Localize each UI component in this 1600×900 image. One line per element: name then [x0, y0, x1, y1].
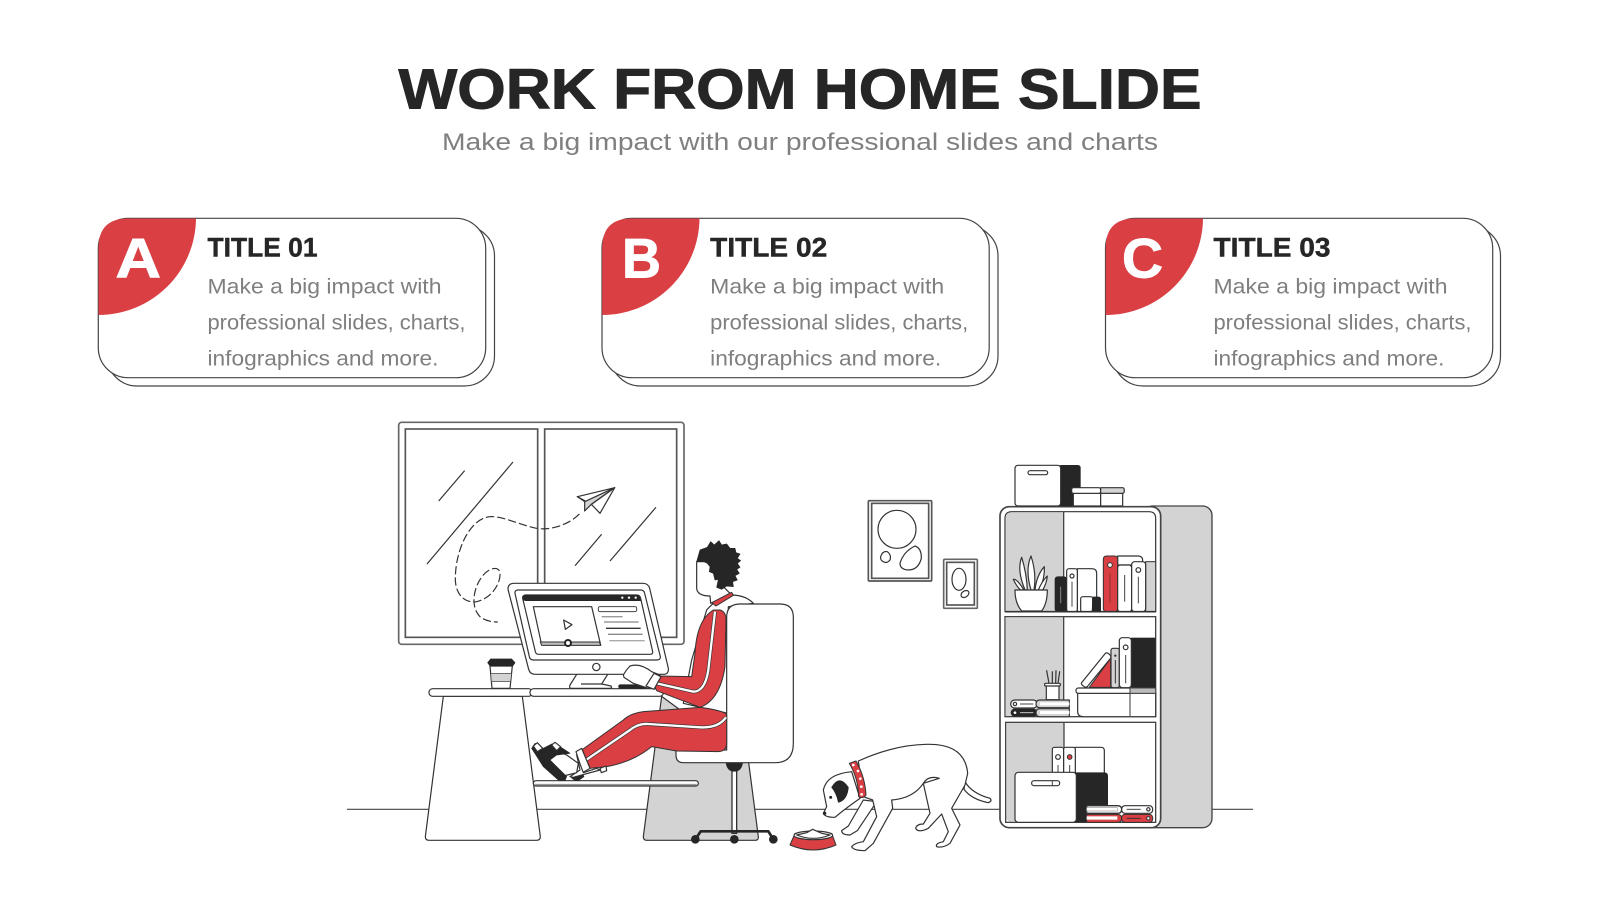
panel: card B	[602, 218, 998, 386]
panel: card C: TITLE 03	[1214, 233, 1330, 263]
binders	[1052, 747, 1104, 776]
ear	[832, 781, 848, 802]
pencil cup	[1045, 671, 1060, 700]
shelf side panel	[1143, 506, 1212, 828]
panel: card B: infographics and more.	[710, 348, 941, 370]
arm	[653, 610, 726, 707]
compartment 1	[1005, 512, 1156, 612]
panel: card C: infographics and more.	[1214, 348, 1444, 370]
floor line	[347, 808, 1253, 810]
panel: card C: professional slides, charts,	[1214, 312, 1472, 334]
text lines	[598, 607, 645, 641]
body	[852, 744, 968, 851]
desk leg	[425, 696, 540, 840]
bookshelf	[1000, 465, 1212, 828]
panel: card A: A	[116, 227, 161, 290]
stand	[570, 673, 612, 688]
leg	[576, 707, 727, 773]
person at desk	[532, 541, 793, 781]
keyboard	[618, 684, 647, 689]
feet and shoes	[532, 742, 600, 781]
torso and shoulder	[683, 595, 753, 713]
subtitle: Make a big impact with our professional slides and charts	[442, 129, 1158, 156]
head	[823, 772, 860, 817]
panel: card B: Make a big impact with	[710, 276, 944, 298]
food bowl	[790, 829, 836, 850]
top shelf boxes	[1015, 465, 1124, 506]
head	[697, 541, 741, 603]
lying books	[1087, 806, 1153, 822]
dashed flight path	[455, 514, 579, 622]
collar	[712, 592, 733, 606]
dog	[790, 744, 991, 851]
paper plane	[577, 488, 615, 513]
hand	[623, 665, 661, 689]
panel: card C	[1106, 218, 1500, 386]
panel: card C: Make a big impact with	[1214, 276, 1448, 298]
chair back and seat	[676, 604, 793, 763]
panel: card B: B	[622, 227, 661, 290]
back front leg	[842, 800, 877, 835]
coffee cup	[488, 659, 515, 688]
grey chair stand background	[643, 696, 758, 840]
potted plant	[1013, 556, 1047, 611]
upright books	[1055, 556, 1156, 612]
leaning and upright books with box	[1076, 638, 1156, 717]
window title bar	[523, 595, 641, 601]
panel: card A: TITLE 01	[208, 233, 318, 263]
panel: card A: professional slides, charts,	[208, 312, 466, 334]
panel: card B: TITLE 02	[710, 233, 827, 263]
compartment 2	[1005, 617, 1156, 717]
bookshelf bottom compartment	[1006, 722, 1156, 822]
collar	[849, 761, 866, 798]
small picture	[944, 559, 977, 608]
shelf body	[1000, 507, 1161, 828]
desk and chair base	[425, 659, 778, 844]
computer monitor	[508, 583, 668, 689]
panel: card A: infographics and more.	[208, 348, 438, 370]
panel: card A	[98, 218, 495, 386]
video panel	[533, 607, 601, 646]
wall pictures	[868, 501, 977, 608]
panel: card B: professional slides, charts,	[710, 312, 968, 334]
window with paper plane	[399, 422, 684, 644]
tail	[964, 782, 991, 803]
title: WORK FROM HOME SLIDE	[398, 58, 1202, 121]
desktop	[429, 689, 532, 696]
footrest	[533, 781, 698, 786]
large picture	[868, 501, 932, 581]
stacked books	[1011, 700, 1069, 717]
panel: card C: C	[1122, 227, 1163, 290]
storage box	[1015, 772, 1108, 822]
panel: card A: Make a big impact with	[208, 276, 442, 298]
chair wheels and post	[691, 763, 778, 844]
